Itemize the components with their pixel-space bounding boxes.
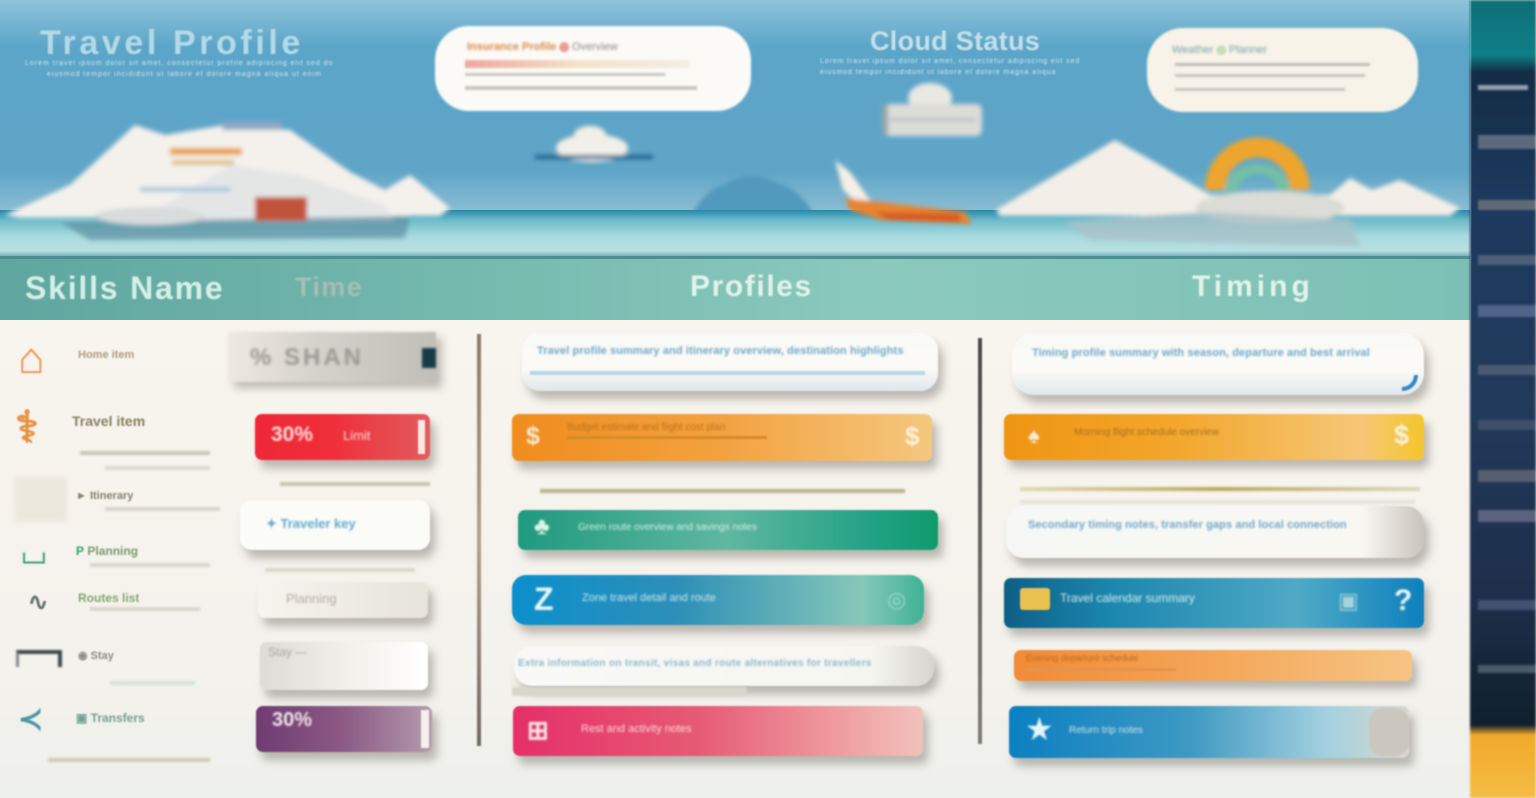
callout: left speech bubble xyxy=(435,26,751,111)
bar: blue row 4: Zone travel detail and route xyxy=(582,592,716,604)
bar: green row 3: ♣ xyxy=(534,513,550,540)
title: centre header: Cloud Status xyxy=(870,26,1040,56)
badge: white tile xyxy=(260,642,428,690)
content panel background xyxy=(0,320,1470,798)
bar: pink row 6: Rest and activity notes xyxy=(581,723,692,735)
bar: orange row 2: $ xyxy=(905,421,919,451)
bar: blue row 4: ? xyxy=(1394,584,1412,617)
badge: purple tile: 30% xyxy=(272,709,312,731)
bar: blue row 4: ▣ xyxy=(1338,588,1359,613)
bar: pale blue row 1: Timing profile summary with season, departure and best arrival xyxy=(1032,347,1370,359)
bar: blue row 6: ★ xyxy=(1025,711,1054,747)
bar: green row 3 xyxy=(518,510,938,550)
title: centre header xyxy=(820,26,1080,76)
bar: orange row 2 xyxy=(512,414,932,461)
title: left header xyxy=(24,24,334,78)
bar: orange row 2: ♠ xyxy=(1028,423,1040,448)
divider: left vertical xyxy=(477,334,481,746)
bar: pink row 6 xyxy=(513,706,923,756)
bar: orange row 5: Evening departure schedule xyxy=(1026,653,1138,663)
icon: person: ⚕ xyxy=(15,403,39,452)
label row 2: Travel item xyxy=(72,413,145,429)
bar: blue row 6 xyxy=(1009,706,1409,758)
sky and sea scene xyxy=(0,0,1470,256)
bar: pale row 3: Secondary timing notes, transfer gaps and local connection xyxy=(1028,519,1347,531)
bar: orange row 2: $ xyxy=(1394,420,1409,450)
callout: right speech bubble xyxy=(1147,28,1418,112)
sidebar: dark navy strip xyxy=(1470,0,1536,798)
label row 5: Routes list xyxy=(78,591,139,605)
label row 6: ◉ Stay xyxy=(78,650,114,662)
title: left header: Lorem travel ipsum dolor sit amet, consectetur profile adipiscing elit sed do xyxy=(25,60,334,67)
section header band xyxy=(0,256,1470,321)
mountain: left island xyxy=(5,122,450,240)
title: left header: Travel Profile xyxy=(40,24,304,62)
bar: pale row 5: Extra information on transit, visas and route alternatives for travellers xyxy=(518,658,872,669)
badge: pale tile xyxy=(258,582,428,618)
badge: red tile: Limit xyxy=(343,428,370,443)
bar: green row 3: Green route overview and savings notes xyxy=(578,522,757,533)
heading: profiles: Profiles xyxy=(690,270,813,303)
icon: arrow: ≺ xyxy=(18,703,43,736)
bar: orange row 2: $ xyxy=(526,422,540,450)
panel: left list xyxy=(14,337,221,763)
callout: right speech bubble: Weather ◎ Planner xyxy=(1172,44,1267,56)
title: centre header: Lorem travel ipsum dolor sit amet, consectetur adipiscing elit sed xyxy=(820,58,1080,65)
title: centre header: eiusmod tempor incididunt ut labore et dolore magna aliqua xyxy=(820,69,1056,76)
bar: blue row 4: ◎ xyxy=(887,587,906,612)
icon: frame xyxy=(16,650,62,667)
label row 1: Home item xyxy=(78,349,134,361)
heading: timing: Timing xyxy=(1192,270,1314,303)
badge: grey title tile: % SHAN xyxy=(250,344,364,371)
icon: small card xyxy=(15,477,67,522)
bar: pale blue row 1 xyxy=(522,333,938,391)
label row 7: ▣ Transfers xyxy=(76,711,145,725)
sidebar rows xyxy=(1478,85,1528,90)
bar: orange row 2 xyxy=(1004,414,1424,460)
panel: right bars xyxy=(1002,334,1434,771)
badge: white blue label xyxy=(240,500,430,550)
panel: centre bars xyxy=(510,334,948,769)
badge: red tile xyxy=(255,414,430,460)
divider line xyxy=(280,482,430,486)
heading: time: Time xyxy=(295,272,363,302)
badge: grey title tile xyxy=(228,332,436,382)
bar: pale row 3 xyxy=(1006,506,1424,558)
callout: left speech bubble: Insurance Profile ◎ Overview xyxy=(467,41,618,53)
bar: blue row 6: Return trip notes xyxy=(1069,725,1143,736)
badge: red tile: 30% xyxy=(271,423,313,446)
title: left header: eiusmod tempor incididunt ut labore et dolore magna aliqua ut enim xyxy=(47,71,322,78)
heading: skills: Skills Name xyxy=(25,270,224,306)
bar: blue row 4: Z xyxy=(534,581,554,617)
bar: pale row 5 xyxy=(514,646,934,686)
airplane xyxy=(835,160,972,224)
bar: orange row 2: Morning flight schedule overview xyxy=(1074,427,1219,438)
bar: pale blue row 1 xyxy=(1012,333,1424,395)
small cloud centre xyxy=(535,126,653,162)
badge: white blue label: ✦ Traveler key xyxy=(266,516,356,531)
label row 3: ► Itinerary xyxy=(76,490,133,502)
bar: orange row 5 xyxy=(1014,650,1412,681)
badge: white tile: Stay — xyxy=(268,645,307,659)
bar: pink row 6: ⊞ xyxy=(527,715,549,745)
badge: pale tile: Planning xyxy=(286,591,337,606)
divider: right vertical xyxy=(978,338,982,744)
label row 4: P Planning xyxy=(76,544,138,558)
floating cloud xyxy=(882,83,982,136)
mountain: right island with rainbow xyxy=(996,137,1460,246)
badge: purple tile xyxy=(256,706,432,752)
bar: blue row 4 xyxy=(1004,578,1424,628)
distant hill xyxy=(692,176,814,214)
bar: pale blue row 1: Travel profile summary and itinerary overview, destination highlights xyxy=(537,345,904,357)
bar: blue row 4: Travel calendar summary xyxy=(1060,591,1195,605)
bar: blue row 4 xyxy=(512,575,924,625)
bar: orange row 2: Budget estimate and flight cost plan xyxy=(567,422,725,433)
